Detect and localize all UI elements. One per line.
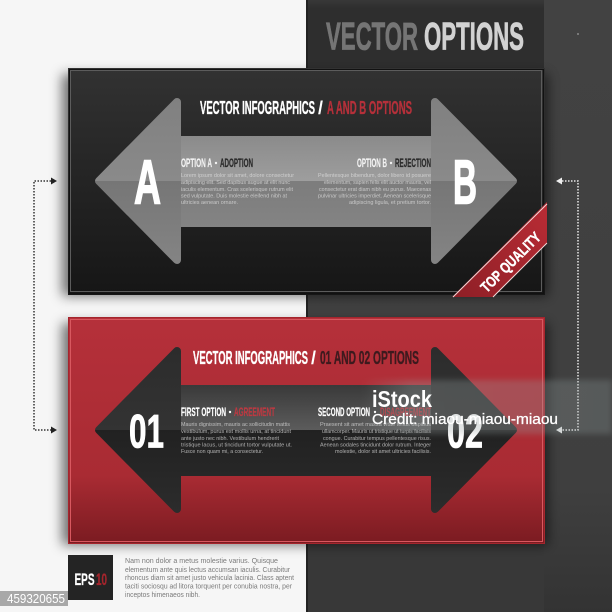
text: second option: ullamcorper. Mauris ut tristique ut turpis facilisis	[322, 429, 431, 435]
text: option B: elementum, sapien felis elit auctor mauris, vel	[324, 180, 431, 186]
note text: rhoncus diam sit amet justo vehicula lacinia. Class aptent	[125, 575, 294, 582]
text: second option	[318, 405, 431, 455]
text: second option: DISAGREEMENT	[380, 405, 431, 419]
text: second option: SECOND OPTION	[318, 405, 370, 419]
note text	[125, 558, 294, 599]
note text: inceptos himenaeos nibh.	[125, 592, 200, 599]
letter A: A	[134, 148, 161, 218]
heading: 01 and 02: /	[311, 348, 316, 368]
text: first option: ante justo nec nibh. Vestibulum hendrerit	[181, 436, 279, 442]
ribbon: top quality	[452, 202, 547, 297]
text: option A: ultricies aenean ornare.	[181, 200, 238, 206]
heading: A and B: VECTOR INFOGRAPHICS	[200, 98, 315, 118]
text: first option: tristique lacus, ut tincidunt tortor vulputate ut.	[181, 442, 292, 448]
arrow: double dark	[99, 351, 513, 509]
note text: Nam non dolor a metus molestie varius. Quisque	[125, 558, 278, 565]
text: second option: Praesent sit amet massa vitae tellus dapibus	[320, 422, 431, 428]
text: first option: Mauris dignissim, mauris ac sollicitudin mattis	[181, 422, 290, 428]
heading: A and B: A AND B OPTIONS	[327, 98, 412, 118]
text: option A: iaculis elementum. Cras scelerisque rutrum elit	[181, 187, 293, 193]
number 01: 01	[129, 404, 164, 458]
title: vector options: OPTIONS	[424, 16, 524, 58]
EPS badge: 10	[96, 571, 107, 589]
heading: A and B: /	[318, 98, 323, 118]
text: second option: congue. Curabitur tempus pellentesque risus.	[323, 436, 431, 442]
text: option B: REJECTION	[395, 156, 431, 170]
note text: taciti sociosqu ad litora torquent per conubia nostra, per	[125, 584, 293, 590]
text: option A: ADOPTION	[220, 156, 253, 170]
letter B: B	[453, 148, 477, 218]
heading: 01 and 02: VECTOR INFOGRAPHICS	[193, 348, 308, 368]
watermark: iStock credit: iStock	[372, 386, 432, 412]
panel: A and B options	[68, 68, 545, 295]
watermark: iStock credit: Credit: miaou-miaou-miaou	[372, 411, 558, 428]
ribbon: top quality: TOP QUALITY	[477, 229, 545, 296]
panel: 01 and 02 options	[68, 317, 545, 544]
watermark band	[362, 380, 612, 434]
connector: left dotted bracket	[34, 178, 57, 434]
text: option A: OPTION A	[181, 156, 212, 170]
EPS badge	[68, 555, 113, 600]
text: option B: Pellentesque bibendum, dolor libero id posuere	[318, 173, 431, 179]
text: first option	[181, 405, 292, 455]
text: option B: OPTION B	[357, 156, 387, 170]
text: option B	[318, 156, 431, 206]
text: first option: vestibulum, purus est mollis urna, at tincidunt	[181, 429, 291, 435]
arrow: double gray	[99, 102, 513, 260]
title: vector options: VECTOR	[326, 16, 418, 58]
text: first option: FIRST OPTION	[181, 405, 226, 419]
heading: 01 and 02: 01 AND 02 OPTIONS	[320, 348, 419, 368]
watermark: iStock credit	[372, 386, 558, 428]
note text: elementum ante quis lectus accumsan iaculis. Curabitur	[125, 567, 291, 574]
text: option B: adipiscing ligula, et pretium tortor.	[349, 200, 431, 206]
text: first option: AGREEMENT	[234, 405, 275, 419]
number 02: 02	[447, 404, 483, 458]
text: option A: adipiscing elit. Sed dapibus augue at elit nunc	[181, 180, 290, 186]
text: option B: pulvinar ultricies imperdiet. Aenean scelerisque	[318, 194, 431, 200]
EPS badge: EPS	[74, 571, 94, 589]
text: first option: Fusce non quam mi, a consectetur.	[181, 449, 263, 455]
text: option B: consectetur erat diam nibh eu purus. Maecenas	[319, 187, 431, 193]
text: second option: molestie, dolor sit amet ultricies facilisis.	[335, 449, 431, 455]
text: option A: sed vulputate. Duis molestie eleifend nibh at	[181, 194, 287, 200]
text: option A	[181, 156, 294, 206]
text: second option: Aenean sodales tincidunt dolor rutrum. Integer	[320, 442, 431, 448]
connector: right dotted bracket	[556, 178, 578, 434]
text: option A: Lorem ipsum dolor sit amet, dolore consectetur	[181, 173, 294, 179]
image id tag: 459320655	[7, 591, 65, 606]
panel shadows	[62, 74, 548, 545]
small dot	[577, 33, 579, 35]
